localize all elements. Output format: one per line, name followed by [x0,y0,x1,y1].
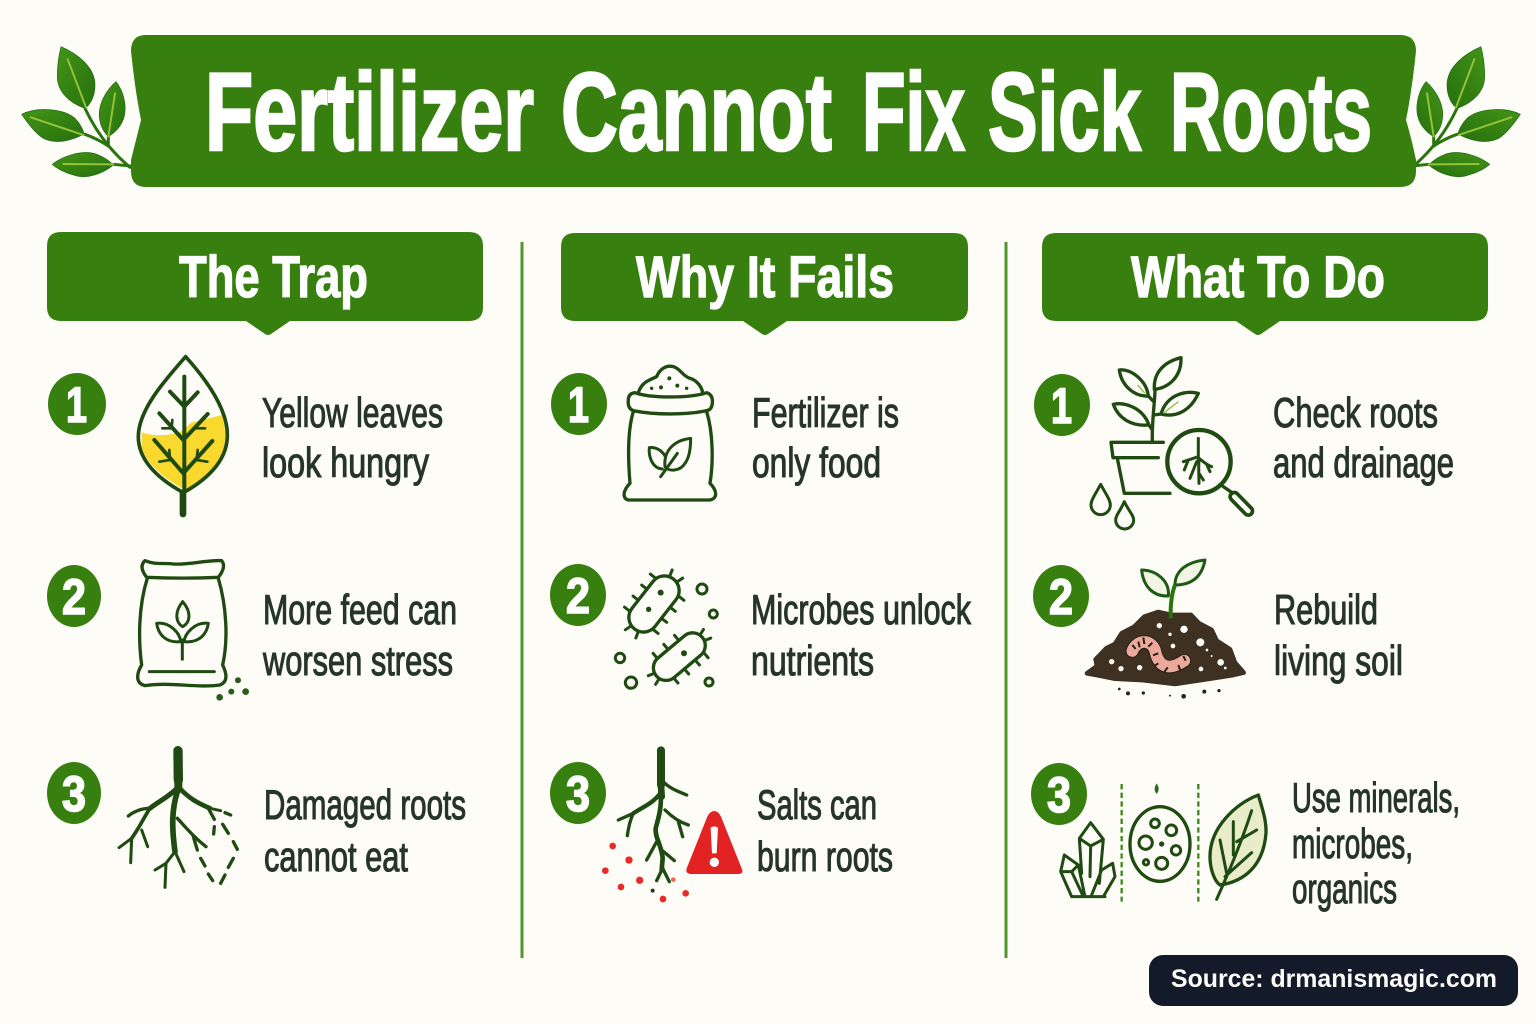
title banner: Sick [988,51,1142,174]
text: Salts can burn roots [757,781,893,880]
text: Damaged roots cannot eat [264,781,466,880]
number badge 3 [550,762,606,824]
number badge 2 [1033,565,1089,627]
source badge [1149,955,1518,1006]
number badge 3: 3 [566,766,590,822]
number badge 2: 2 [62,569,86,625]
title banner: Cannot [561,51,832,174]
text: More feed can worsen stress [262,586,457,684]
text: Yellow leaves look hungry: Yellow leaves [262,389,443,436]
icon: open fertilizer sack [624,366,716,500]
number badge 1 [48,373,106,435]
number badge 1 [1034,374,1090,436]
text: Use minerals, microbes, organics: microbes, [1292,820,1413,867]
text: Yellow leaves look hungry: look hungry [262,439,429,486]
text: Fertilizer is only food: Fertilizer is [752,389,899,436]
icon: microbes [614,561,719,695]
number badge 3: 3 [1047,767,1071,823]
text: Rebuild living soil: Rebuild [1274,586,1378,633]
icon: left leaf sprig [22,47,130,177]
number badge 2: 2 [566,568,590,624]
text: Check roots and drainage: Check roots [1273,389,1438,436]
divider left [520,242,524,958]
heading: The Trap: The Trap [179,245,368,310]
text: Damaged roots cannot eat: cannot eat [264,833,408,880]
text: Fertilizer is only food [752,389,899,486]
number badge 1: 1 [1051,378,1072,434]
text: Check roots and drainage [1273,389,1454,486]
heading: What To Do: What To Do [1131,245,1385,310]
title banner [131,35,1416,187]
title banner: Fix [862,51,965,174]
heading: Why It Fails [561,233,968,335]
icon: right leaf sprig [1412,47,1520,177]
number badge 1: 1 [568,377,589,433]
icon: damaged roots [119,751,237,887]
number badge 1: 1 [66,377,87,433]
text: Fertilizer is only food: only food [752,439,881,486]
number badge 2: 2 [1049,569,1073,625]
text: Microbes unlock nutrients: Microbes unlock [751,586,972,633]
icon: roots with salt warning [602,750,742,902]
text: Rebuild living soil: living soil [1274,637,1403,684]
panel: Why It Fails [550,233,972,902]
divider right [1004,242,1008,958]
number badge 3 [47,762,101,824]
text: Yellow leaves look hungry [262,389,443,486]
source badge: Source: drmanismagic.com [1171,965,1497,993]
number badge 2 [47,565,101,627]
text: Microbes unlock nutrients: nutrients [751,637,874,684]
number badge 3: 3 [62,766,86,822]
icon: minerals, microbes and organic leaf [1061,783,1266,902]
heading: What To Do [1042,233,1488,335]
heading: The Trap [47,232,483,335]
text: Use minerals, microbes, organics [1292,774,1460,912]
icon: potted plant with magnifier on roots [1091,358,1248,529]
panel: The Trap [47,232,483,887]
text: Damaged roots cannot eat: Damaged roots [264,781,466,828]
text: Microbes unlock nutrients [751,586,972,684]
title banner: Roots [1170,51,1372,174]
text: Salts can burn roots: burn roots [757,833,893,880]
icon: yellowing leaf [138,357,227,514]
heading: Why It Fails: Why It Fails [636,245,894,310]
number badge 3 [1031,763,1087,825]
title banner: Fertilizer [205,51,534,174]
number badge 1 [551,373,607,435]
icon: fertilizer bag [138,561,249,701]
icon: soil mound with worm and sprout [1087,560,1244,699]
text: More feed can worsen stress: More feed can [263,586,457,633]
number badge 2 [550,564,606,626]
text: More feed can worsen stress: worsen stress [262,637,453,684]
text: Use minerals, microbes, organics: organics [1292,865,1397,912]
panel: What To Do [1031,233,1488,912]
text: Check roots and drainage: and drainage [1273,439,1454,486]
text: Rebuild living soil [1274,586,1403,684]
text: Salts can burn roots: Salts can [757,781,877,828]
